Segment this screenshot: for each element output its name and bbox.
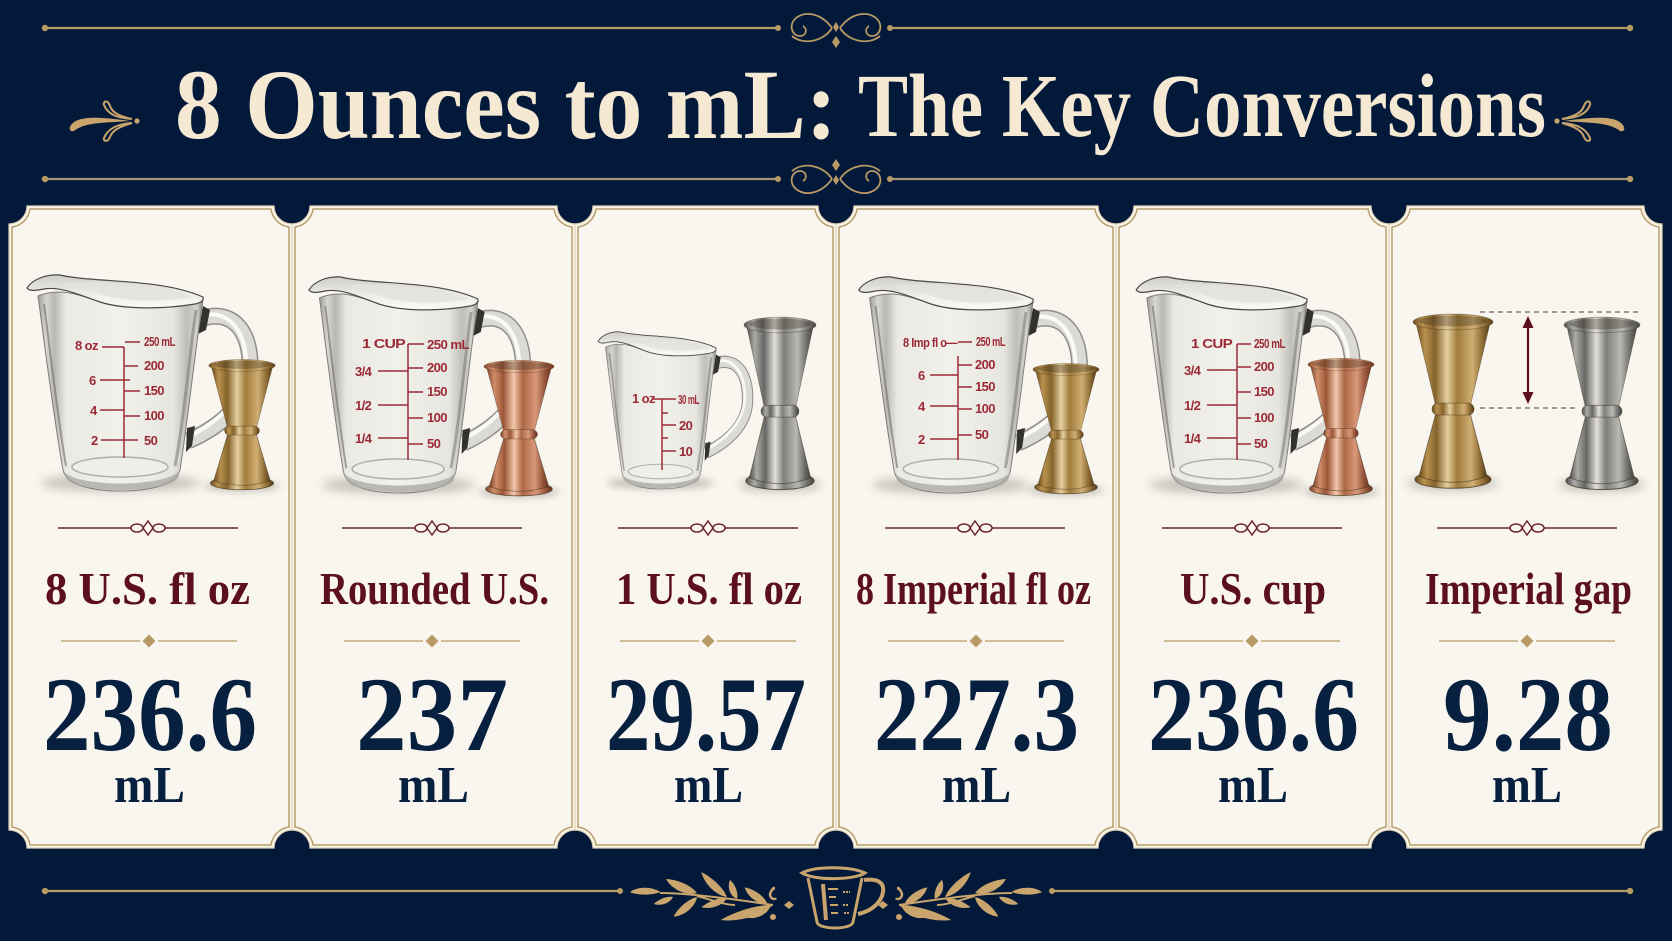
panel: U.S. cup: [1116, 206, 1389, 848]
value: 9.28: [1443, 656, 1613, 773]
unit: mL: [1218, 757, 1288, 814]
dashed reference lines: [1480, 312, 1640, 408]
title: The Key Conversions: [858, 57, 1546, 156]
panel: 8 Imperial fl oz: [836, 206, 1116, 848]
measuring jug: 8 imperial fl oz: 2: [918, 432, 925, 447]
panel: Imperial gap: [1389, 206, 1662, 848]
measuring jug: 8 imperial fl oz: 150: [975, 379, 995, 394]
gold divider: [620, 634, 796, 648]
brass jigger: [1407, 314, 1499, 490]
steel jigger: [739, 317, 821, 492]
panel: Rounded U.S.: [292, 206, 575, 848]
footer rule: [42, 888, 1633, 894]
unit: mL: [114, 757, 185, 814]
measuring jug: 8 oz: 150: [144, 383, 164, 398]
value: 29.57: [606, 656, 806, 773]
measuring jug: 1 cup: 1/4: [355, 431, 373, 446]
measuring jug: 1 cup: 150: [427, 384, 447, 399]
unit: mL: [942, 757, 1011, 814]
measuring jug: U.S. cup: 50: [1254, 436, 1268, 451]
measuring jug: U.S. cup: 1 CUP: [1191, 336, 1233, 351]
measuring jug: 8 imperial fl oz: 6: [918, 368, 925, 383]
value: 236.6: [1148, 656, 1359, 773]
measuring jug: 8 oz: [27, 275, 250, 491]
measuring jug: 8 imperial fl oz: 4: [918, 399, 926, 414]
lower title rule with ornament: [42, 159, 1633, 193]
measuring jug: 1 cup: 200: [427, 360, 447, 375]
measuring jug: 8 oz: 8 oz: [75, 338, 99, 353]
measuring jug: U.S. cup: 150: [1254, 384, 1274, 399]
measuring jug: 8 oz: 4: [90, 403, 98, 418]
small measuring jug: 1 oz: [598, 332, 748, 489]
measuring jug: U.S. cup: 250 mL: [1254, 336, 1285, 351]
copper jigger: [1303, 358, 1379, 497]
maroon divider: [885, 521, 1065, 535]
measuring jug: 8 oz: 250 mL: [144, 334, 175, 349]
measuring jug: U.S. cup: 3/4: [1184, 363, 1202, 378]
measuring jug: 8 imperial fl oz: 250 mL: [976, 334, 1005, 349]
measuring jug: 1 cup: 50: [427, 436, 441, 451]
measuring jug: 8 oz: 50: [144, 433, 158, 448]
value: 236.6: [43, 656, 257, 773]
maroon divider: [1162, 521, 1342, 535]
measuring jug: 1 cup: 100: [427, 410, 447, 425]
label: Imperial gap: [1425, 563, 1632, 614]
measuring jug: 8 oz: 100: [144, 408, 164, 423]
measuring jug: 1 cup: 250 mL: [427, 337, 470, 352]
maroon divider: [58, 521, 238, 535]
measuring jug: 8 imperial fl oz: 200: [975, 357, 995, 372]
brass jigger: [1028, 364, 1104, 495]
panel: 1 U.S. fl oz: [575, 206, 836, 848]
copper jigger: [479, 360, 559, 497]
measuring jug: 1 cup: 1/2: [355, 398, 372, 413]
label: Rounded U.S.: [320, 563, 549, 614]
small measuring jug: 1 oz: 1 oz: [632, 391, 656, 406]
panel: 8 U.S. fl oz: [9, 206, 292, 848]
small measuring jug: 1 oz: 20: [679, 418, 693, 433]
measuring jug: U.S. cup: 200: [1254, 359, 1274, 374]
measuring jug: 1 cup: 1 CUP: [362, 336, 406, 351]
steel jigger: [1558, 317, 1646, 492]
value: 237: [356, 656, 508, 773]
gold divider: [888, 634, 1064, 648]
left title flourish: [70, 101, 140, 141]
unit: mL: [398, 757, 469, 814]
measuring jug: 8 imperial fl oz: 100: [975, 401, 995, 416]
gold divider: [61, 634, 237, 648]
measuring jug: 8 oz: 200: [144, 358, 164, 373]
label: U.S. cup: [1180, 563, 1326, 614]
footer right laurel branch: [878, 870, 1042, 925]
measuring jug: U.S. cup: 100: [1254, 410, 1274, 425]
measuring jug: 8 imperial fl oz: [859, 277, 1080, 493]
gold divider: [1439, 634, 1615, 648]
measuring jug: 1 cup: [309, 277, 523, 493]
measuring jug: 8 oz: 2: [91, 433, 98, 448]
unit: mL: [674, 757, 743, 814]
right title flourish: [1554, 101, 1624, 141]
label: 1 U.S. fl oz: [616, 563, 802, 614]
title: [175, 49, 1546, 160]
double-headed arrow: [1522, 316, 1534, 404]
gold divider: [344, 634, 520, 648]
measuring jug: 8 imperial fl oz: 8 Imp fl o—: [903, 335, 958, 350]
top rule with ornament: [42, 14, 1633, 48]
brass jigger: [204, 360, 280, 491]
measuring jug: U.S. cup: [1136, 277, 1353, 493]
measuring jug: 8 imperial fl oz: 50: [975, 427, 989, 442]
measuring jug: 1 cup: 3/4: [355, 364, 373, 379]
measuring jug: 8 oz: 6: [89, 373, 96, 388]
label: 8 U.S. fl oz: [45, 563, 250, 614]
footer measuring cup icon: [802, 868, 883, 928]
maroon divider: [1437, 521, 1617, 535]
measuring jug: U.S. cup: 1/2: [1184, 398, 1201, 413]
maroon divider: [618, 521, 798, 535]
maroon divider: [342, 521, 522, 535]
small measuring jug: 1 oz: 10: [679, 444, 693, 459]
small measuring jug: 1 oz: 30 mL: [678, 392, 699, 407]
title: 8 Ounces to mL:: [175, 49, 837, 160]
label: 8 Imperial fl oz: [856, 563, 1091, 614]
unit: mL: [1492, 757, 1562, 814]
measuring jug: U.S. cup: 1/4: [1184, 431, 1202, 446]
gold divider: [1164, 634, 1340, 648]
value: 227.3: [874, 656, 1079, 773]
footer left laurel branch: [630, 870, 794, 925]
